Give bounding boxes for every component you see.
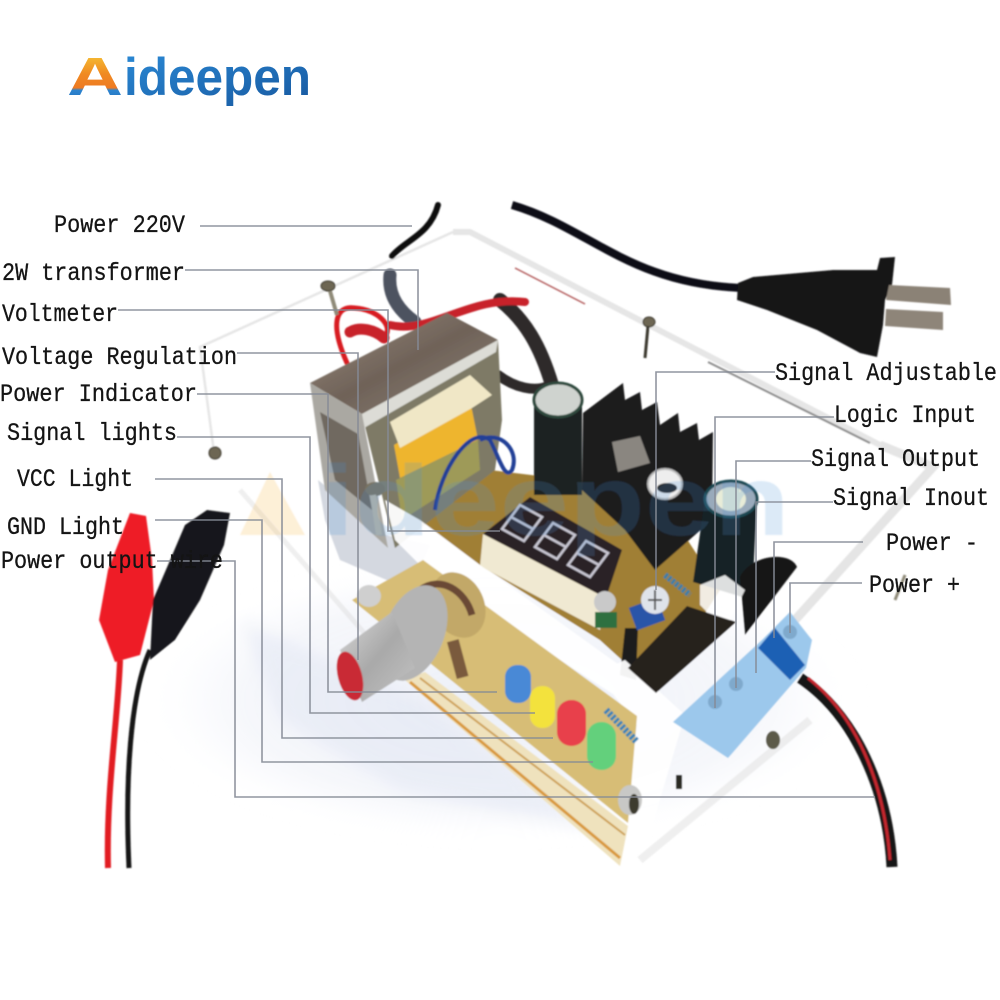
bracket beside transformer: [318, 480, 430, 590]
digital voltmeter display: [480, 497, 622, 630]
trimmer, resistors and parts: [594, 575, 690, 630]
label: 2W transformer: 2W transformer: [2, 259, 185, 288]
potentiometer body: [420, 563, 496, 679]
logo: Aideepen: A: [67, 47, 123, 107]
callout lines right: [656, 372, 863, 708]
screws: [209, 281, 905, 600]
heat sink mounting hole: [648, 469, 682, 499]
output wire red and black: [800, 678, 892, 867]
heat sink: [582, 383, 713, 570]
indicator LEDs: [505, 665, 637, 770]
acrylic inner divider: [385, 500, 745, 850]
black alligator clip and wire: [128, 510, 230, 868]
label: GND Light: GND Light: [7, 513, 124, 542]
input wires: [337, 205, 552, 389]
label: Logic Input: Logic Input: [834, 401, 976, 430]
label: Power Indicator: Power Indicator: [0, 380, 197, 409]
watermark logo: [240, 445, 790, 557]
watermark logo: ideepen: [320, 445, 790, 557]
printed circuit board upper: [420, 470, 720, 690]
lower panel PCB: [352, 560, 637, 866]
blue terminal block: [673, 612, 812, 758]
bottom mount screw: [357, 585, 780, 815]
logo: Aideepen: ideepen: [124, 48, 311, 107]
label: VCC Light: VCC Light: [17, 465, 133, 494]
label: Power -: Power -: [886, 529, 978, 558]
power cord and plug: [512, 205, 951, 357]
soft shadow under case: [130, 550, 870, 850]
label: Power output wire: Power output wire: [1, 547, 223, 576]
acrylic case outline: [200, 232, 933, 860]
label: Power +: Power +: [869, 571, 960, 600]
product photo: DIY regulated power supply kit in acrylic case: [99, 205, 951, 868]
buzzer: [740, 557, 797, 635]
red alligator clip and wire: [99, 513, 154, 868]
label: Voltmeter: Voltmeter: [2, 300, 118, 329]
regulator chip tab: [612, 436, 650, 472]
label: Power 220V: Power 220V: [54, 211, 185, 240]
transformer: [310, 313, 514, 548]
black IC block: [628, 606, 736, 693]
callout lines left: [118, 226, 875, 797]
label: Voltage Regulation: Voltage Regulation: [2, 343, 237, 372]
label: Signal lights: Signal lights: [7, 419, 177, 448]
adjustment knob: [332, 575, 461, 703]
capacitors: [534, 383, 757, 680]
